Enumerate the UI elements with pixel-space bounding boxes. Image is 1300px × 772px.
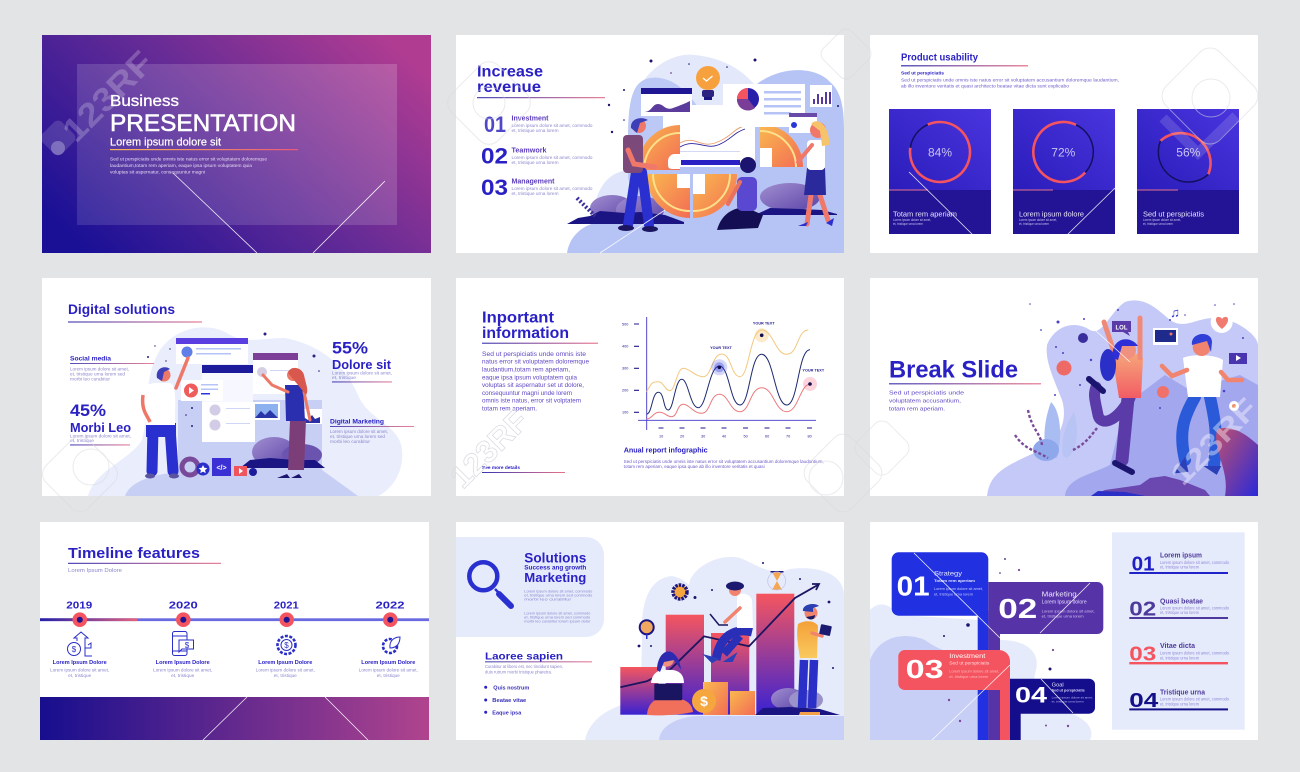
heading: Product usability: Product usability <box>901 52 978 64</box>
callout panel: solutions: Lorem ipsum dolore sit amet, commodo <box>524 611 590 615</box>
timeline item: 2021: Lorem ipsum dolore sit amet, <box>256 668 315 672</box>
list item: 02 Teamwork: et, tristique urna lorem <box>512 160 559 165</box>
bullet list: Beatae vitae <box>492 698 526 704</box>
marker: blue <box>710 346 733 375</box>
decorative dots <box>147 332 320 427</box>
list row 03: Lorem ipsum dolore sit amet, commodo <box>1160 651 1230 656</box>
marker: pink: YOUR TEXT <box>802 368 825 372</box>
bullet list: Quis nostrum <box>493 685 530 691</box>
decorative dots <box>1029 303 1244 409</box>
step 02: Marketing: Marketing <box>1042 592 1077 599</box>
panel: numbered steps slide <box>870 522 1258 740</box>
panel: business presentation cover slide <box>42 35 431 253</box>
text block: chart caption: Sed ut perspiciatis unde omnis iste natus error sit voluptatem accusantium doloremque laudantium, <box>624 459 824 464</box>
text block: social media: morbi leo curabitur <box>70 376 110 382</box>
bar chart <box>620 594 794 715</box>
timeline item: 2019 <box>50 601 109 678</box>
step 04: Goal: Goal <box>1052 682 1064 688</box>
card: 56 percent <box>1137 109 1239 234</box>
figure: woman touching screen <box>263 368 310 478</box>
text block: social media: Lorem ipsum dolore sit amet, <box>70 366 129 372</box>
list item: 01 Investment: 01 <box>484 112 506 137</box>
text block: digital marketing <box>330 419 414 444</box>
list row 02: Quasi beatae <box>1160 598 1203 605</box>
card: 84 percent: et, tristique urna lorem <box>893 222 923 226</box>
timeline item: 2021: et, tristique <box>274 673 298 678</box>
heading: PRESENTATION: PRESENTATION <box>110 110 296 137</box>
list row 04 <box>1129 690 1230 712</box>
step 03: Investment: Sed ut perspiciatis <box>949 661 990 666</box>
list row 01: Lorem ipsum <box>1160 552 1202 559</box>
card: 56 percent: 56% <box>1176 146 1201 160</box>
text block: Laoree sapien: Curabitur at libero est, nec tincidunt sapien, <box>485 664 563 669</box>
ui card: photo <box>253 402 280 420</box>
line chart: 400 <box>622 344 628 348</box>
ui card: profile <box>789 113 817 133</box>
figure: woman with skirt <box>798 121 834 226</box>
list item: 03 Management: et, tristique urna lorem <box>512 191 559 196</box>
figure: dancing man <box>1162 334 1242 472</box>
card: 72 percent: 72% <box>1051 146 1076 160</box>
heading: Inportant information: information <box>482 325 569 342</box>
watermark stamp on cover slide <box>38 44 160 158</box>
stat: 45 percent Morbi Leo <box>70 401 131 445</box>
watermark stamp on cover slide: 123RF <box>55 44 160 149</box>
bush <box>755 688 840 715</box>
coin stacks: $ <box>700 693 708 709</box>
figure: bearded man with tablet <box>797 604 832 715</box>
card: 56 percent: Sed ut perspiciatis <box>1143 210 1204 218</box>
callout panel: solutions <box>456 537 604 637</box>
list item: 02 Teamwork <box>482 147 592 165</box>
icon: coin and arrow: $ <box>72 645 77 654</box>
text block: social media <box>70 356 154 382</box>
bush <box>240 437 325 468</box>
bullet list: Eaque ipsa <box>492 710 521 716</box>
line chart: 10 <box>659 434 663 438</box>
panel: solutions marketing slide <box>456 522 844 740</box>
illustration background blobs <box>585 557 844 740</box>
timeline item: 2019: Lorem ipsum dolore sit amet, <box>50 668 109 672</box>
list item: 03 Management: Management <box>512 178 555 186</box>
card: 56 percent: et, tristique urna lorem <box>1143 222 1173 226</box>
list row 04: Tristique urna <box>1160 690 1205 697</box>
text block: intro: Sed ut perspiciatis <box>901 70 945 76</box>
line chart: 500 <box>622 322 628 326</box>
figure: seated woman <box>717 157 763 230</box>
subheading: Lorem Ipsum Dolore <box>68 568 122 574</box>
step 04: Goal: Sed ut perspiciatis <box>1052 689 1085 693</box>
timeline item: 2022: et, tristique <box>377 673 401 678</box>
text block: paragraph: omnis iste natus, error sit volptatem <box>482 399 581 405</box>
chart line: dark series <box>647 350 810 414</box>
bullet list <box>484 685 530 716</box>
footer gradient band <box>40 697 429 740</box>
icon: light bulb <box>696 66 720 100</box>
stat: 45 percent Morbi Leo: et, tristique <box>70 438 94 443</box>
coin stacks <box>692 682 755 715</box>
callout panel: solutions: et, tristique urna lorem sed commodo <box>524 615 590 619</box>
icon: dollar gear <box>673 585 687 599</box>
timeline axis <box>40 618 429 621</box>
timeline item: 2020: Lorem Ipsum Dolore <box>156 660 210 666</box>
timeline item: 2022: Lorem Ipsum Dolore <box>361 660 415 666</box>
list item: 01 Investment <box>484 116 592 133</box>
stat: 55 percent Dolore sit <box>332 339 392 382</box>
text block: digital marketing: Lorem ipsum dolore sit amet, <box>330 429 388 434</box>
text block: Laoree sapien: Laoree sapien <box>485 651 563 662</box>
illustration: bushes <box>567 183 837 224</box>
text block: chart caption: totam rem aperiam, eaque ipsa quae ab illo inventore veritatis et quasi <box>624 464 765 469</box>
card: 84 percent: 84% <box>928 146 952 160</box>
ui windows <box>176 338 298 442</box>
panel: product usability slide <box>870 35 1258 253</box>
illustration: split coin <box>637 124 803 218</box>
stat: 55 percent Dolore sit: 55% <box>332 339 368 358</box>
link: see more details <box>482 465 565 473</box>
timeline item: 2021: 2021 <box>274 601 299 612</box>
text block: paragraph: eaque ipsa ipsum voluptatem quia <box>482 375 578 381</box>
stat: 45 percent Morbi Leo: Morbi Leo <box>70 421 131 435</box>
text block: paragraph <box>482 352 590 412</box>
line chart: 20 <box>680 434 684 438</box>
icon: leaf gear <box>383 637 400 653</box>
marker: yellow: YOUR TEXT <box>753 321 775 325</box>
step 02: Marketing: Lorem ipsum dolore sit amet, <box>1042 609 1095 614</box>
list row 03 <box>1129 643 1230 666</box>
callout panel: solutions: morbi leo curabitur lorem ipsum dolor <box>524 619 591 623</box>
step 01: Strategy: Strategy <box>934 571 963 578</box>
text block: intro: Sed ut perspiciatis unde omnis iste natus error sit voluptatem accusantium doloremque laudantium, <box>901 78 1119 82</box>
figure: man pushing coin <box>618 118 658 232</box>
link: see more details: See more details <box>482 465 520 471</box>
timeline item: 2022: Lorem ipsum dolore sit amet, <box>359 668 418 672</box>
stat: 55 percent Dolore sit: et, tristique <box>332 375 356 380</box>
list row 04: Lorem ipsum dolore sit amet, commodo <box>1160 697 1230 702</box>
step 01: Strategy: Lorem ipsum dolore sit amet, <box>934 587 983 591</box>
step 04: Goal: et, tristique urna lorem <box>1052 700 1084 704</box>
step 03: Investment: et, tristique urna lorem <box>949 675 988 679</box>
heading: Inportant information: Inportant <box>482 310 555 327</box>
panel: timeline features slide <box>40 522 429 740</box>
callout panel: solutions: Solutions <box>524 549 586 565</box>
step 02: Marketing: et, tristique urna lorem <box>1042 614 1084 619</box>
list row 03: 03 <box>1129 644 1156 666</box>
step 03: Investment <box>898 650 1010 690</box>
line chart: 40 <box>722 434 726 438</box>
text block: social media: Social media <box>70 356 112 363</box>
marker: blue: YOUR TEXT <box>710 346 733 350</box>
bushes and rock <box>1091 428 1258 496</box>
vertical ribbon stems <box>978 610 1021 740</box>
illustration background blobs <box>567 55 844 253</box>
list item: 03 Management <box>482 178 592 196</box>
card: 72 percent <box>1013 109 1115 234</box>
line chart: 70 <box>786 434 790 438</box>
timeline item: 2022: 2022 <box>376 601 405 612</box>
text block: paragraph: laudantium,totam rem aperiam, <box>482 368 570 374</box>
timeline item: 2020: et, tristique <box>171 673 195 678</box>
text block: description: voluptatem accusantium, <box>889 398 962 404</box>
card: 84 percent: Lorem ipsum dolore sit amet, <box>893 218 931 222</box>
text block: cover description <box>110 156 267 176</box>
list item: 01 Investment: Investment <box>512 116 549 123</box>
timeline item: 2019: 2019 <box>66 601 93 612</box>
timeline item: 2021 <box>256 601 315 678</box>
step 03: Investment: Investment <box>949 653 986 660</box>
step 04: Goal: 04 <box>1015 682 1048 707</box>
line chart: 60 <box>765 434 769 438</box>
figure: man sitting on bar with laptop <box>706 582 753 662</box>
icons: emoji badges <box>1056 333 1239 411</box>
icon: play card <box>1229 353 1247 364</box>
card: 72 percent: Lorem ipsum dolore sit amet, <box>1019 218 1057 222</box>
icon: phone with dollar: $ <box>185 641 190 650</box>
text block: Laoree sapien: duis rutrum morbi tristique pharetra. <box>485 669 552 674</box>
list row 04: 04 <box>1129 690 1159 712</box>
card: 72 percent: Lorem ipsum dolore <box>1019 210 1084 218</box>
card: 84 percent <box>889 109 991 234</box>
step 02: Marketing: Lorem Ipsum dolore <box>1042 600 1087 606</box>
text block: chart caption: Anual report infographic <box>624 445 708 454</box>
list item: 02 Teamwork: Lorem ipsum dolore sit amet, commodo <box>512 155 593 160</box>
heading: Digital solutions: Digital solutions <box>68 301 175 317</box>
list row 01: 01 <box>1132 553 1155 575</box>
step 04: Goal <box>1010 679 1095 714</box>
icon: hourglass <box>768 571 786 590</box>
step 01: Strategy: Totam rem aperiam <box>934 578 975 583</box>
text block: paragraph: totam rem aperiam. <box>482 406 537 412</box>
line chart: 80 <box>808 434 812 438</box>
list row 04: et, tristique urna lorem <box>1160 702 1199 707</box>
line chart <box>622 317 825 438</box>
chart card: area chart <box>641 88 692 116</box>
callout panel: solutions: Marketing <box>524 570 586 585</box>
callout panel: solutions: Lorem ipsum dolore sit amet, commodo <box>524 590 592 594</box>
timeline item: 2020: 2020 <box>169 601 198 612</box>
illustration background blobs <box>88 327 402 496</box>
text block: paragraph: voluptas sit aspernatur set ut dolore, <box>482 383 584 389</box>
list item: 01 Investment: Lorem ipsum dolore sit amet, commodo <box>512 123 593 128</box>
text block: intro <box>901 70 1119 88</box>
text block: description: totam rem aperiam. <box>889 407 946 413</box>
heading: Business: Business <box>110 93 179 110</box>
list row 02: et, tristique urna lorem <box>1160 610 1199 615</box>
icons: gear, star, code, play, check: </> <box>216 465 227 472</box>
line chart: 100 <box>622 410 628 414</box>
heading: Timeline features: Timeline features <box>68 545 200 562</box>
chart line: yellow series <box>647 330 808 392</box>
step 01: Strategy: et, tristique urna lorem <box>934 592 973 596</box>
decorative dots <box>608 58 839 133</box>
step 01: Strategy <box>892 552 988 616</box>
timeline item: 2019: Lorem Ipsum Dolore <box>53 660 107 666</box>
panel: digital solutions slide <box>42 278 431 496</box>
text block: description: Sed ut perspiciatis unde <box>889 391 964 397</box>
callout panel: solutions: Success ang growth <box>524 566 587 572</box>
list row 01: et, tristique urna lorem <box>1160 565 1199 570</box>
figure: jumping woman <box>1089 318 1143 472</box>
text block: Laoree sapien <box>485 651 592 674</box>
stat: 45 percent Morbi Leo: Lorem ipsum dolore sit amet, <box>70 434 131 438</box>
decorative dots <box>943 558 1069 727</box>
figure: sitting woman with laptop <box>647 651 693 715</box>
callout panel: solutions: morbi leo curabitur <box>524 597 572 601</box>
list item: 03 Management: Lorem ipsum dolore sit amet, commodo <box>512 186 593 191</box>
list row 03: Vitae dicta <box>1160 643 1195 650</box>
text block: intro: ab illo inventore veritatis et quasi architecto beatae vitae dicta sunt explicabo <box>901 84 1069 88</box>
text block: cover description: laudantium,totam rem aperiam, eaque ipsa ipsum voluptatem quia <box>110 163 252 169</box>
timeline item: 2021: Lorem Ipsum Dolore <box>258 660 312 666</box>
icon: music note: ♫ <box>1170 305 1180 320</box>
line chart: 50 <box>744 434 748 438</box>
chart line: red series <box>647 384 810 419</box>
text block: description <box>889 391 964 413</box>
list row 02 <box>1129 598 1230 621</box>
decorative dots <box>638 562 834 669</box>
text block: paragraph: consequuntur magni unde lorem <box>482 391 572 397</box>
callout panel: solutions: et, tristique urna lorem sed commodo <box>524 594 592 598</box>
text block: paragraph: natus error sit voluptatem doloremque <box>482 360 590 366</box>
line chart: 300 <box>622 366 628 370</box>
figure: man pointing <box>141 358 188 478</box>
heading: Increase revenue: revenue <box>477 79 541 96</box>
text block: digital marketing: morbi leo curabitur <box>330 439 370 444</box>
list item: 01 Investment: et, tristique urna lorem <box>512 128 559 133</box>
stat: 45 percent Morbi Leo: 45% <box>70 401 106 420</box>
list item: 02 Teamwork: 02 <box>481 144 508 168</box>
text block: cover description: voluptas sit aspernatur, consequuntur magni <box>110 170 205 176</box>
icon: map pin <box>640 620 654 639</box>
heading: Break Slide: Break Slide <box>889 357 1018 384</box>
right panel: numbered list <box>1112 532 1245 730</box>
step 03: Investment: 03 <box>906 654 944 684</box>
icon: LOL bubble <box>1112 321 1131 336</box>
illustration background blobs <box>987 300 1258 496</box>
text block: chart caption <box>624 445 824 469</box>
stat: 55 percent Dolore sit: Lorem ipsum dolore sit amet, <box>332 370 392 376</box>
subheading: Lorem ipsum dolore sit <box>110 136 221 148</box>
step 02: Marketing <box>988 582 1103 634</box>
heading: Increase revenue <box>478 66 542 92</box>
chart card: pie chart <box>723 84 805 127</box>
heading: Inportant information <box>482 310 569 342</box>
panel: increase revenue slide <box>456 35 844 253</box>
step 01: Strategy: 01 <box>897 571 930 602</box>
stat: 55 percent Dolore sit: Dolore sit <box>332 358 392 372</box>
watermark text on chart slide: 123RF <box>443 403 535 495</box>
panel: important information chart slide <box>456 278 844 496</box>
icons: gear, star, code, play, check <box>182 458 257 476</box>
card: 56 percent: Lorem ipsum dolore sit amet, <box>1143 218 1181 222</box>
line chart: 200 <box>622 388 628 392</box>
text block: digital marketing: et, tristique urna lorem sed <box>330 434 385 439</box>
watermark text on break slide: 123RF <box>1165 392 1264 492</box>
step 04: Goal: Lorem ipsum dolore sit amet, <box>1052 695 1093 699</box>
list item: 02 Teamwork: Teamwork <box>512 148 547 154</box>
panel: break slide <box>870 278 1258 496</box>
chart card: mini bars <box>810 85 832 107</box>
list row 03: et, tristique urna lorem <box>1160 656 1199 661</box>
illustration: main report panel <box>663 105 755 167</box>
timeline item: 2019: et, tristique <box>68 673 92 678</box>
card: 84 percent: Totam rem aperiam <box>893 210 957 218</box>
step 03: Investment: Lorem ipsum dolore sit amet, <box>949 670 999 674</box>
ui card: graph <box>304 409 322 424</box>
card: 72 percent: et, tristique urna lorem <box>1019 222 1049 226</box>
text block: digital marketing: Digital Marketing <box>330 419 384 426</box>
ui card: video player <box>181 380 218 401</box>
icon: magnifier <box>469 562 511 606</box>
list row 01 <box>1129 552 1230 575</box>
icon: LOL bubble: LOL <box>1116 326 1128 332</box>
text block: social media: et, tristique urna lorem sed <box>70 372 125 376</box>
icon: heart bubble <box>1211 311 1233 333</box>
icon: dollar gear: $ <box>284 641 289 650</box>
step 02: Marketing: 02 <box>998 593 1037 624</box>
line chart: 30 <box>701 434 705 438</box>
text block: cover description: Sed ut perspiciatis unde omnis iste natus error sit voluptatem doloremque <box>110 156 267 162</box>
timeline item: 2020 <box>153 601 212 678</box>
timeline item: 2022 <box>359 601 418 678</box>
list item: 03 Management: 03 <box>481 175 508 200</box>
heading: Increase revenue: Increase <box>477 64 543 80</box>
icon: photo card <box>1153 328 1178 345</box>
growth arrow <box>620 584 819 687</box>
marker: pink <box>802 368 825 391</box>
plant with leaves <box>1015 402 1097 461</box>
list row 01: Lorem ipsum dolore sit amet, commodo <box>1160 560 1230 565</box>
background blobs <box>870 605 1091 740</box>
list row 02: 02 <box>1129 599 1156 621</box>
text block: paragraph: Sed ut perspiciatis unde omnis iste <box>482 352 587 358</box>
list row 02: Lorem ipsum dolore sit amet, commodo <box>1160 605 1230 610</box>
marker: yellow <box>753 321 775 342</box>
timeline item: 2020: Lorem ipsum dolore sit amet, <box>153 668 212 672</box>
